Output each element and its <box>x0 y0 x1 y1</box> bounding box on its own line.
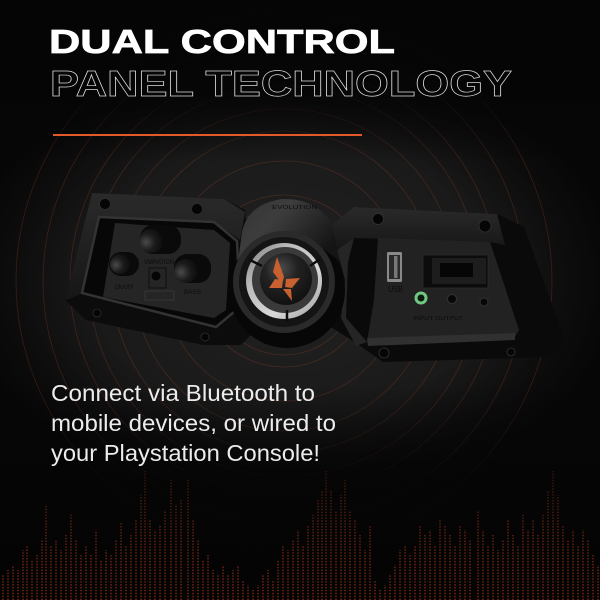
left panel labels: VIBRATION <box>144 260 174 266</box>
left panel labels <box>115 260 201 296</box>
orange divider <box>53 134 362 136</box>
equalizer graphic <box>3 470 598 600</box>
right panel <box>320 207 566 362</box>
body text: Connect via Bluetooth to <box>51 380 315 406</box>
icon: orange logo <box>269 257 300 301</box>
left panel labels: BASS <box>184 290 201 296</box>
left panel <box>65 193 253 345</box>
knobs <box>109 225 211 283</box>
right panel label: INPUT OUTPUT <box>413 316 464 322</box>
usb port <box>387 252 402 282</box>
vibration switch <box>145 268 174 300</box>
body text: your Playstation Console! <box>51 440 320 466</box>
usb label: USB <box>388 285 403 294</box>
screws <box>372 214 515 358</box>
body text: mobile devices, or wired to <box>51 410 336 436</box>
jack holes <box>448 294 488 306</box>
aux jack: green <box>414 292 428 304</box>
screws <box>93 198 209 341</box>
left panel labels: ON/OFF <box>115 285 134 291</box>
title line 2: outlined: PANEL TECHNOLOGY <box>50 63 512 104</box>
rocker recess <box>423 255 488 288</box>
title line 1: DUAL CONTROL <box>49 23 395 60</box>
lens white ring <box>246 243 322 319</box>
concentric sound rings <box>16 13 552 549</box>
control panel <box>65 193 566 362</box>
centre hub <box>229 199 345 348</box>
centre hub: EVOLUTION <box>272 205 318 211</box>
body text <box>51 380 336 466</box>
